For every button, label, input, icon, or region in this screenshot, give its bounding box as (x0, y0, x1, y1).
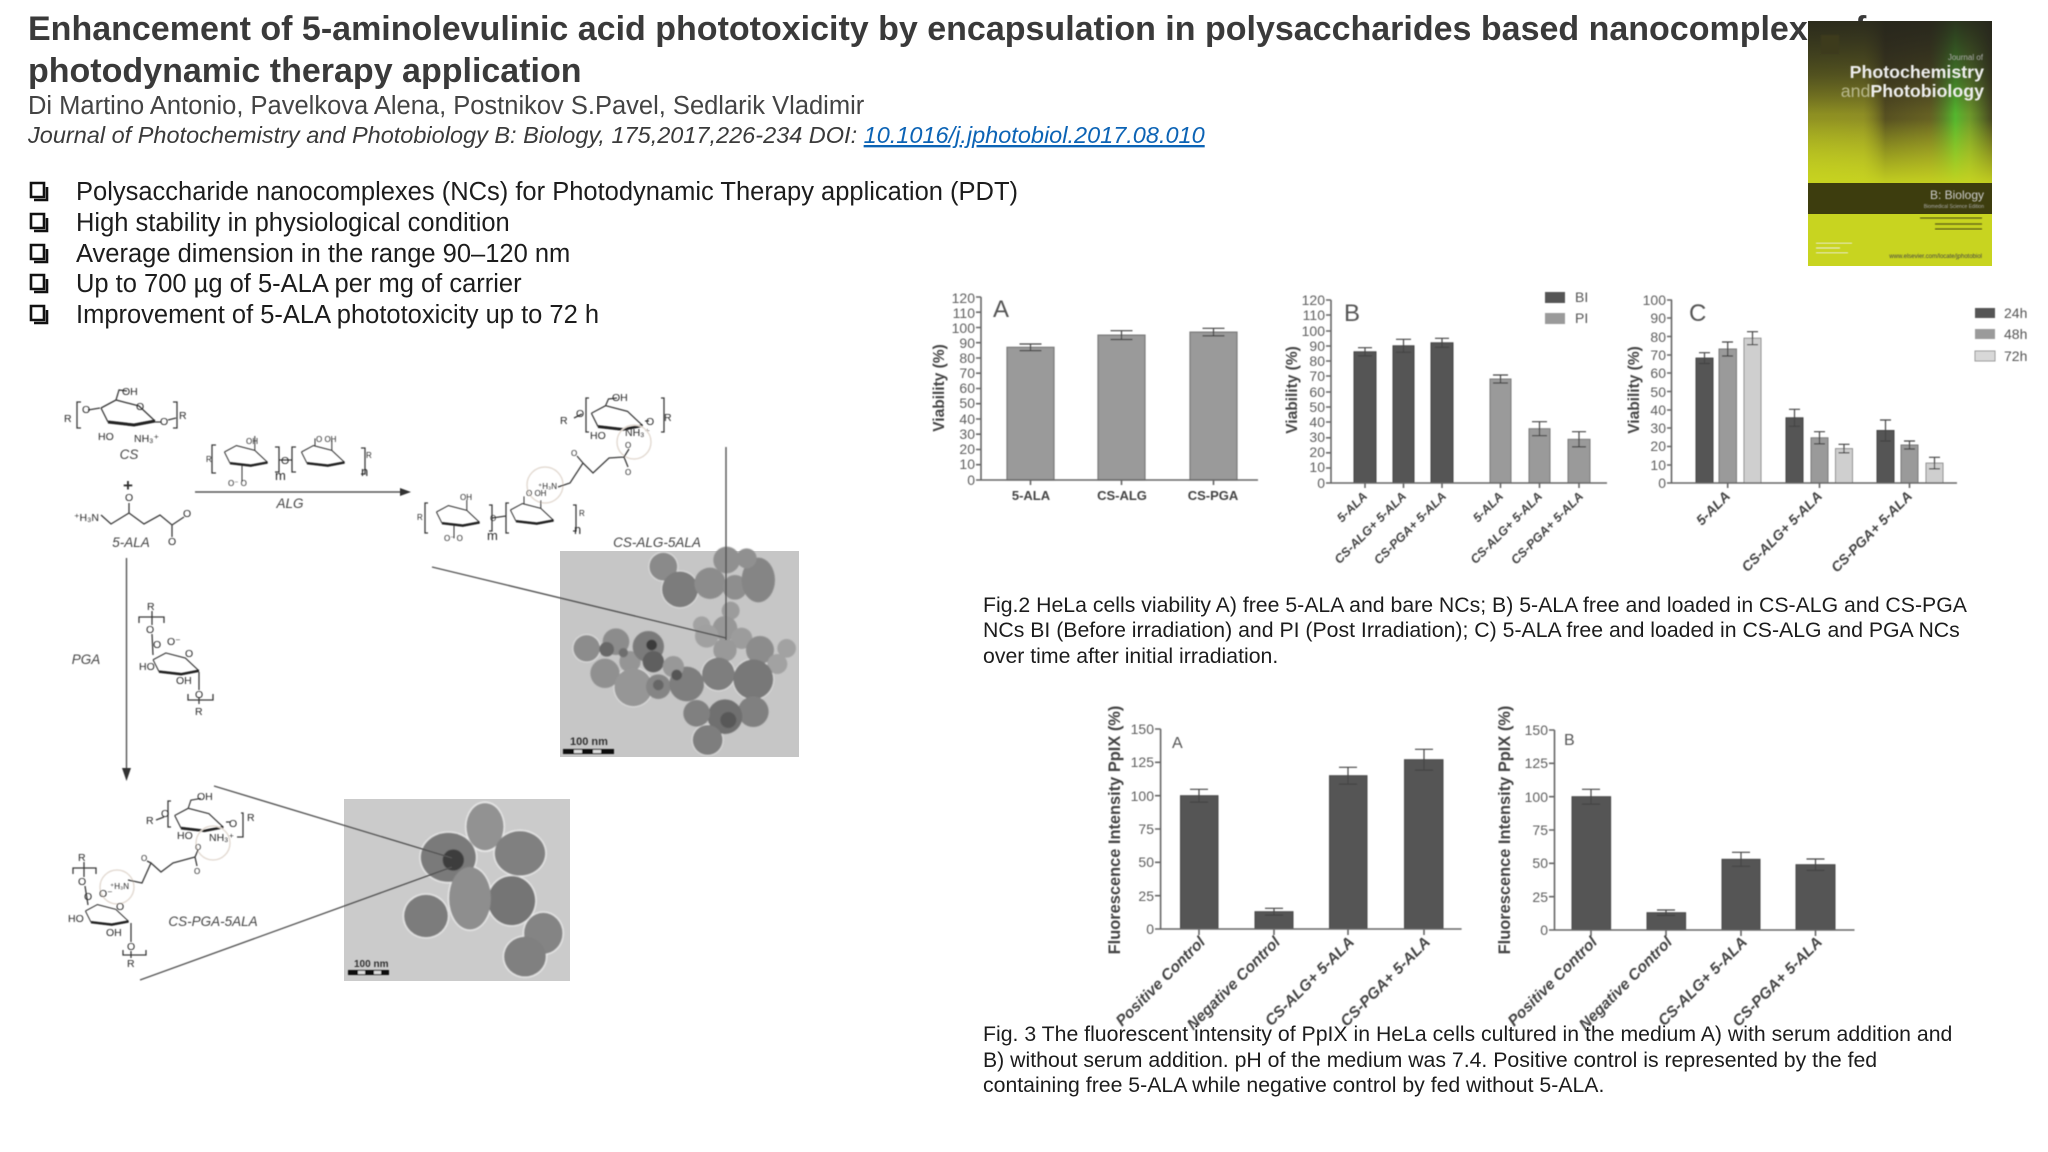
structure: CS-ALG-5ALA: m (487, 528, 498, 543)
journal cover: andPhotobiology (1841, 81, 1984, 101)
key points bullet list (31, 178, 1018, 329)
category labels: CS-PGA (1188, 488, 1239, 503)
category labels: CS-ALG+ 5-ALA (1332, 489, 1409, 567)
structure: CS chitosan: NH₃⁺ (134, 433, 159, 445)
journal cover: www.elsevier.com/locate/jphotobiol (1888, 254, 1982, 260)
y axis labels: 120 (952, 290, 975, 306)
category labels: CS-ALG (1097, 488, 1147, 503)
category labels: CS-PGA+ 5-ALA (1729, 934, 1826, 1030)
category labels (1113, 933, 1434, 1034)
category labels (1693, 488, 1915, 575)
category labels (1332, 489, 1586, 567)
structure: CS chitosan: O (160, 416, 168, 428)
y axis labels: 50 (1650, 384, 1666, 400)
structure: ALG alginate: ALG (275, 496, 304, 511)
scale bar (563, 736, 614, 754)
y axis labels: 10 (1650, 457, 1666, 473)
structure: CS-ALG-5ALA: OH (460, 493, 472, 502)
y axis labels: 110 (953, 305, 975, 321)
structure: CS-PGA-5ALA: R (127, 958, 135, 970)
TEM micrograph: CS-ALG-5ALA (560, 547, 799, 757)
axis title: Fluorescence Intensity PpIX (%) (1106, 706, 1124, 954)
y axis labels: 10 (959, 456, 975, 472)
category labels: CS-ALG+ 5-ALA (1738, 488, 1825, 575)
structure: CS-PGA-5ALA (68, 791, 255, 970)
structure: PGA: HO (139, 661, 155, 673)
y axis labels: 20 (959, 441, 975, 457)
category labels: CS-PGA+ 5-ALA (1508, 489, 1586, 567)
structure: PGA: O (146, 624, 154, 636)
bullet text: High stability in physiological condition (76, 209, 510, 237)
structure: CS-ALG-5ALA: n (574, 522, 581, 537)
journal cover: Photochemistry (1850, 62, 1984, 82)
category labels: CS-ALG+ 5-ALA (1468, 489, 1545, 567)
y axis labels: 20 (1309, 444, 1325, 460)
y axis labels: 70 (1650, 347, 1666, 363)
y axis labels: 70 (1309, 368, 1325, 384)
legend: 24h (2004, 305, 2027, 321)
y axis labels: 100 (1643, 292, 1666, 308)
structure: PGA: R (195, 706, 203, 718)
y axis labels: 40 (959, 411, 975, 427)
panel letter: B (1564, 732, 1575, 749)
category labels: 5-ALA (1470, 489, 1506, 525)
bars (1572, 797, 1835, 930)
category labels: Positive Control (1113, 933, 1209, 1030)
panel letter: A (993, 296, 1009, 323)
structure: CS-ALG-5ALA: HO (590, 430, 606, 442)
structure: CS-PGA-5ALA: O (84, 891, 92, 903)
y axis labels: 0 (1540, 922, 1548, 938)
structure: CS-ALG-5ALA: O (571, 449, 577, 458)
structure: ALG alginate: m (275, 468, 286, 483)
structure: CS chitosan: O (82, 404, 90, 416)
structure: CS-ALG-5ALA: OH (612, 392, 628, 404)
journal reference with DOI link: Journal of Photochemistry and Photobiology B: Biology, 175,2017,226-234 DOI: 10.1016/j.jphotobiol.2017.08.010 (27, 122, 1205, 148)
legend (1545, 289, 1588, 326)
panel letter: A (1172, 735, 1183, 752)
y axis labels: 150 (1525, 722, 1548, 738)
y axis labels (952, 290, 975, 488)
structure: CS-PGA-5ALA: O⁻ (99, 888, 113, 900)
journal cover: Journal of (1948, 53, 1984, 62)
y axis labels: 30 (1650, 420, 1666, 436)
y axis labels: 90 (1309, 338, 1325, 354)
structure: CS-PGA-5ALA: HO (177, 830, 193, 842)
legend: 48h (2004, 326, 2027, 342)
category labels: 5-ALA (1012, 488, 1051, 503)
category labels (1505, 933, 1826, 1034)
category labels: Positive Control (1505, 933, 1601, 1030)
structure: 5-ALA: O (125, 492, 133, 504)
y axis labels: 90 (1650, 310, 1666, 326)
y axis labels: 60 (1650, 365, 1666, 381)
y axis labels: 60 (959, 380, 975, 396)
bullet text: Up to 700 µg of 5-ALA per mg of carrier (76, 270, 522, 298)
structure: CS chitosan: R (64, 413, 72, 425)
structure: ALG alginate: O OH (316, 435, 337, 444)
label: PGA: PGA (72, 652, 100, 667)
y axis labels: 100 (1302, 323, 1325, 339)
caption: Fig.2: over time after initial irradiation. (983, 644, 1278, 668)
y axis labels: 0 (1146, 921, 1154, 937)
structure: PGA: O (195, 689, 203, 701)
bars (1354, 343, 1453, 483)
arrow: PGA reaction (122, 558, 131, 781)
y axis labels: 75 (1532, 822, 1548, 838)
chemistry scheme (64, 386, 701, 970)
panel letter: C (1689, 300, 1706, 327)
y axis labels: 125 (1131, 754, 1154, 770)
structure: CS-ALG-5ALA: NH₃⁺ (625, 427, 650, 439)
scale bar: 100 nm (570, 736, 608, 748)
structure: CS-ALG-5ALA (417, 392, 672, 543)
plus sign: + (123, 476, 133, 495)
bullet text (76, 178, 1018, 329)
bars (1696, 358, 1894, 483)
caption: Fig.3: B) without serum addition. pH of the medium was 7.4. Positive control is represented by the fed (983, 1048, 1877, 1072)
legend: 72h (2004, 348, 2027, 364)
y axis labels: 60 (1309, 384, 1325, 400)
chart: Fig.2 C viability over time (1626, 292, 2027, 575)
axis title: Viability (%) (1626, 346, 1643, 434)
structure: CS-ALG-5ALA: O OH (526, 489, 547, 498)
scale bar (348, 959, 389, 975)
structure: CS chitosan (64, 386, 187, 462)
structure: CS-PGA-5ALA: R (78, 852, 86, 864)
structure: ALG alginate: O (281, 455, 289, 467)
y axis labels: 80 (1309, 353, 1325, 369)
y axis labels: 100 (952, 320, 975, 336)
structure: 5-ALA: ⁺H₃N (74, 512, 99, 524)
structure: CS-ALG-5ALA: R (664, 412, 672, 424)
structure: PGA: O (185, 648, 193, 660)
structure: CS-PGA-5ALA: R (146, 815, 154, 827)
y axis labels: 125 (1525, 755, 1548, 771)
structure: CS-PGA-5ALA: O (161, 808, 169, 820)
structure: CS-ALG-5ALA: O⁻ O (444, 534, 463, 543)
structure: CS chitosan: R (179, 410, 187, 422)
structure: PGA: OH (176, 675, 192, 687)
bullet text: Improvement of 5-ALA phototoxicity up to 72 h (76, 301, 599, 329)
y axis labels: 150 (1131, 721, 1154, 737)
structure: CS-PGA-5ALA: O (127, 941, 135, 953)
structure: CS-PGA-5ALA: O (194, 867, 200, 876)
chart: Fig.3 A fluorescence with serum (1106, 706, 1462, 1034)
y axis labels: 80 (1650, 329, 1666, 345)
structure: CS chitosan: OH (122, 386, 138, 398)
axis title: Viability (%) (931, 344, 948, 432)
axis title: Fluorescence Intensity PpIX (%) (1496, 706, 1514, 954)
structure: PGA: O⁻ (167, 636, 181, 648)
bullet text: Average dimension in the range 90–120 nm (76, 240, 570, 268)
structure: CS-PGA-5ALA: O (141, 854, 147, 863)
y axis labels: 0 (1317, 475, 1325, 491)
legend: BI (1575, 289, 1588, 305)
y axis labels: 30 (959, 426, 975, 442)
caption: Fig.2 (983, 593, 1968, 668)
title (28, 10, 1900, 90)
category labels: CS-PGA+ 5-ALA (1828, 488, 1915, 575)
caption: Fig.3: Fig. 3 The fluorescent intensity of PpIX in HeLa cells cultured in the medium A) with serum addition and (983, 1022, 1952, 1046)
y axis labels: 40 (1650, 402, 1666, 418)
TEM micrograph: CS-PGA-5ALA (344, 799, 570, 981)
structure: CS-PGA-5ALA: R (247, 812, 255, 824)
structure: CS-PGA-5ALA: O (116, 901, 124, 913)
particles (572, 547, 796, 756)
y axis labels (1643, 292, 1666, 491)
structure: CS chitosan: CS (120, 447, 138, 462)
structure: CS-ALG-5ALA: O (625, 441, 631, 450)
structure: CS-ALG-5ALA: O (490, 514, 496, 523)
structure: 5-ALA: O (168, 536, 176, 548)
chart: Fig.3 B fluorescence without serum (1496, 706, 1854, 1034)
structure: CS-ALG-5ALA: O (576, 408, 584, 420)
journal cover: Biomedical Science Edition (1924, 204, 1984, 210)
zoom lines linking structures to TEM images (140, 447, 726, 980)
structure: CS-PGA-5ALA: O (78, 876, 86, 888)
y axis labels: 90 (959, 335, 975, 351)
structure: CS chitosan: O (136, 401, 144, 413)
structure: CS-ALG-5ALA: R (560, 415, 568, 427)
y axis labels: 25 (1138, 888, 1154, 904)
structure: CS-PGA-5ALA: HO (68, 913, 84, 925)
caption: Fig.2: Fig.2 HeLa cells viability A) free 5-ALA and bare NCs; B) 5-ALA free and loaded in CS-ALG and CS-PGA (983, 593, 1968, 617)
bars (1007, 332, 1237, 480)
caption: Fig.3: containing free 5-ALA while negative control by fed without 5-ALA. (983, 1073, 1604, 1097)
y axis labels: 20 (1650, 438, 1666, 454)
label: CS-PGA-5ALA: CS-PGA-5ALA (168, 914, 258, 929)
structure: CS-ALG-5ALA: O (625, 468, 631, 477)
structure: CS chitosan: HO (98, 431, 114, 443)
structure: CS-ALG-5ALA: R (579, 509, 585, 518)
chart: Fig.2 A viability (931, 290, 1258, 503)
structure: CS-PGA-5ALA: ⁺H₃N (110, 882, 129, 891)
y axis labels: 120 (1302, 292, 1325, 308)
axis title: Viability (%) (1284, 346, 1301, 434)
structure: CS-PGA-5ALA: O (229, 818, 237, 830)
arrow: ALG reaction (195, 488, 411, 496)
scale bar: 100 nm (354, 959, 389, 970)
category labels: CS-ALG+ 5-ALA (1655, 934, 1751, 1030)
category labels: 5-ALA (1334, 489, 1370, 525)
bullet icons (31, 183, 47, 323)
category labels (1012, 488, 1239, 503)
structure: ALG alginate: n (361, 464, 368, 479)
category labels: Negative Control (1184, 933, 1284, 1034)
structure: CS-ALG-5ALA: O (646, 416, 654, 428)
y axis labels (1525, 722, 1548, 938)
category labels: Negative Control (1576, 933, 1676, 1034)
y axis labels: 50 (1138, 854, 1154, 870)
y axis labels: 40 (1309, 414, 1325, 430)
structure: ALG alginate: O⁻ O (228, 479, 247, 488)
legend (1975, 305, 2027, 364)
structure: CS-PGA-5ALA: NH₃⁺ (209, 832, 234, 844)
structure: ALG alginate: OH (246, 437, 258, 446)
bars (1180, 760, 1443, 929)
y axis labels: 50 (1532, 855, 1548, 871)
structure: 5-ALA: 5-ALA (112, 535, 150, 550)
particles (403, 801, 564, 978)
y axis labels: 50 (959, 395, 975, 411)
category labels: 5-ALA (1693, 488, 1733, 528)
legend: PI (1575, 310, 1588, 326)
journal cover (1808, 21, 1992, 266)
authors: Di Martino Antonio, Pavelkova Alena, Postnikov S.Pavel, Sedlarik Vladimir (28, 92, 865, 120)
structure: PGA: O (153, 639, 161, 651)
y axis labels: 80 (959, 350, 975, 366)
category labels: CS-ALG+ 5-ALA (1262, 934, 1358, 1030)
y axis labels: 100 (1525, 789, 1548, 805)
title: photodynamic therapy application (28, 52, 582, 90)
structure: CS-PGA-5ALA: OH (197, 791, 213, 803)
panel letter: B (1344, 300, 1360, 327)
title: Enhancement of 5-aminolevulinic acid phototoxicity by encapsulation in polysaccharides based nanocomplexes for (28, 10, 1900, 48)
structure: CS-PGA-5ALA: O (195, 843, 201, 852)
structure: CS-ALG-5ALA: R (417, 513, 423, 522)
caption: Fig.2: NCs BI (Before irradiation) and PI (Post Irradiation); C) 5-ALA free and loaded in CS-ALG and PGA NCs (983, 618, 1960, 642)
y axis labels: 75 (1138, 821, 1154, 837)
chart: Fig.2 B viability (1284, 289, 1607, 567)
structure: ALG alginate: R (206, 455, 212, 464)
structure: ALG alginate: R (366, 451, 372, 460)
y axis labels: 10 (1309, 459, 1325, 475)
bullet text: Polysaccharide nanocomplexes (NCs) for Photodynamic Therapy application (PDT) (76, 178, 1018, 206)
y axis labels: 50 (1309, 399, 1325, 415)
y axis labels: 100 (1131, 788, 1154, 804)
y axis labels: 70 (959, 365, 975, 381)
y axis labels: 110 (1303, 307, 1325, 323)
structure: ALG alginate (206, 435, 372, 511)
y axis labels: 0 (1658, 475, 1666, 491)
structure: 5-ALA: O (183, 508, 191, 520)
y axis labels: 0 (967, 472, 975, 488)
y axis labels (1302, 292, 1325, 491)
structure: CS-PGA-5ALA: OH (106, 927, 122, 939)
structure: PGA: R (147, 601, 155, 613)
structure: PGA (139, 601, 213, 718)
y axis labels: 25 (1532, 889, 1548, 905)
category labels: CS-PGA+ 5-ALA (1337, 934, 1434, 1030)
y axis labels (1131, 721, 1154, 937)
structure: CS-ALG-5ALA: ⁺H₃N (538, 482, 557, 491)
y axis labels: 30 (1309, 429, 1325, 445)
journal cover: B: Biology (1930, 188, 1984, 202)
category labels: CS-PGA+ 5-ALA (1371, 489, 1449, 567)
structure: 5-ALA (74, 492, 191, 550)
caption: Fig.3 (983, 1022, 1952, 1097)
label: CS-ALG-5ALA: CS-ALG-5ALA (613, 535, 701, 550)
